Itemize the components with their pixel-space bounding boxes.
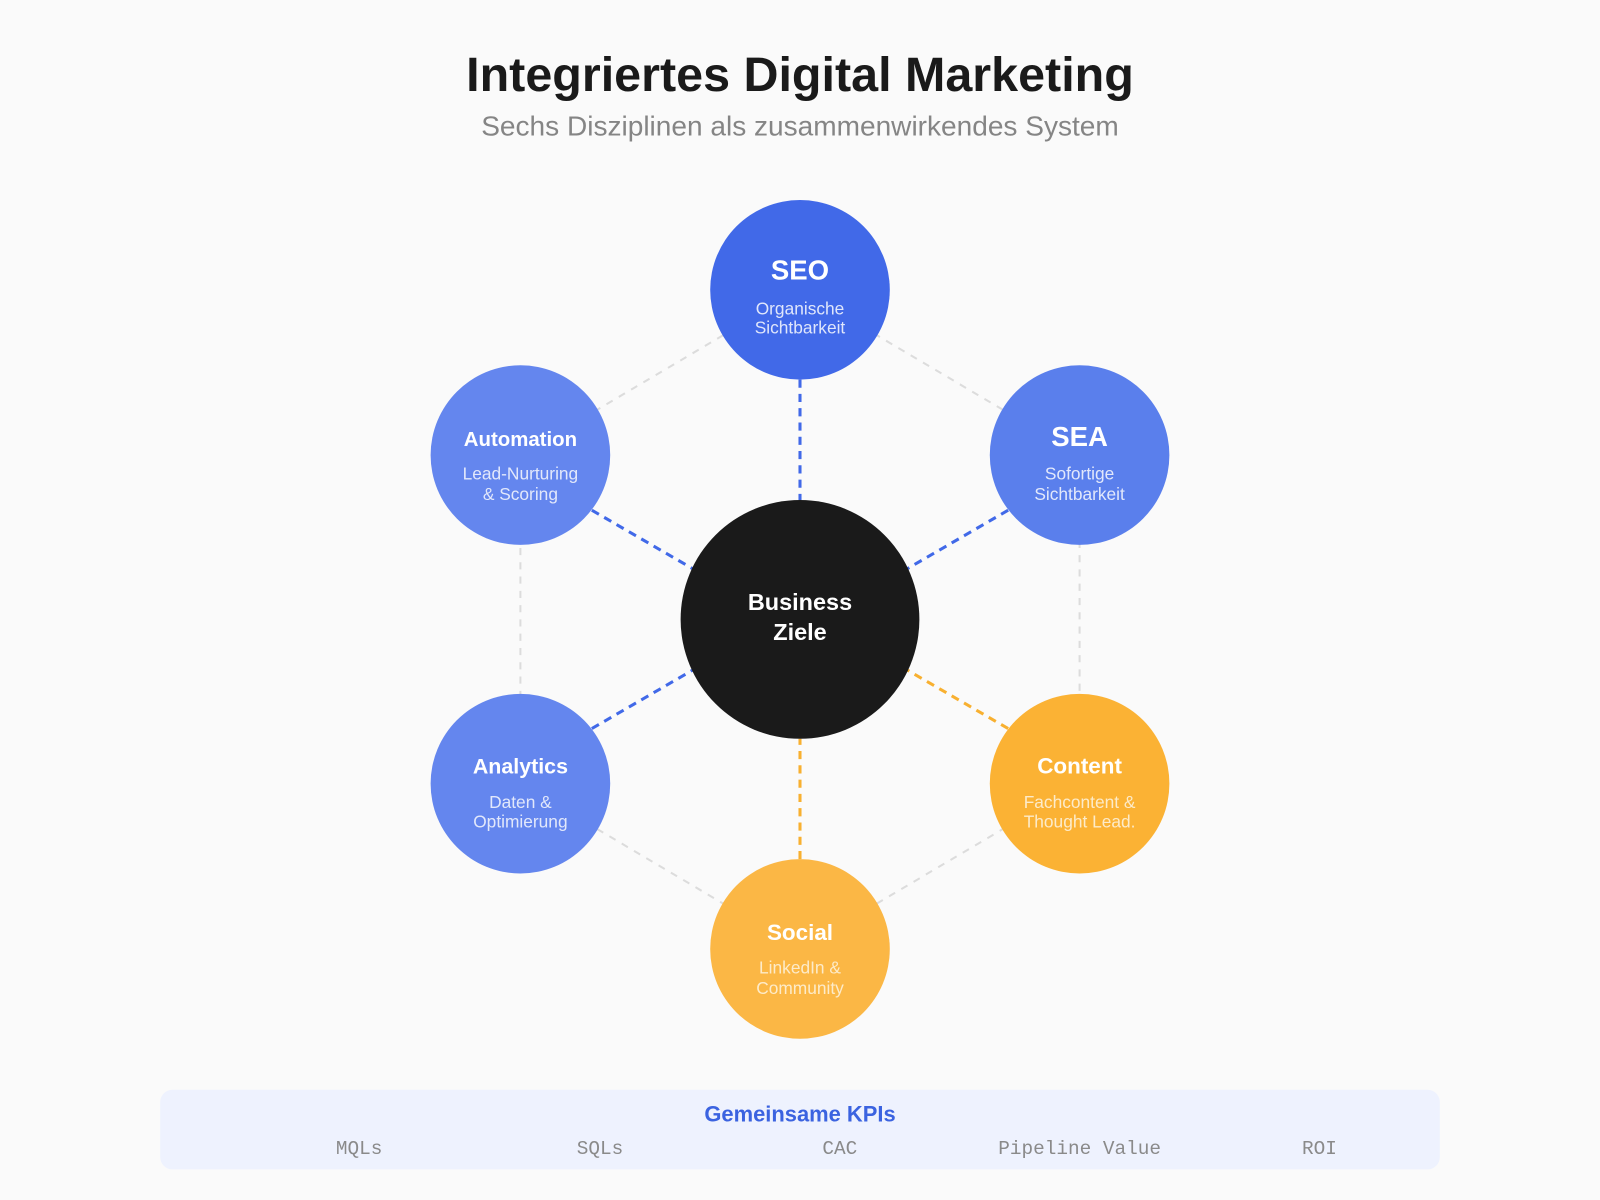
node: Automation bbox=[431, 365, 610, 545]
node: Automation: Lead-Nurturing bbox=[463, 464, 578, 484]
node: SEO: Sichtbarkeit bbox=[755, 318, 845, 338]
node: Automation: Automation bbox=[464, 429, 577, 451]
panel: Gemeinsame KPIs: SQLs bbox=[577, 1138, 623, 1160]
node: Analytics bbox=[431, 694, 610, 873]
node: Social: Social bbox=[767, 920, 833, 945]
node: Social: LinkedIn & bbox=[759, 957, 841, 977]
node: SEO bbox=[710, 200, 890, 380]
node: Social: Community bbox=[756, 978, 844, 998]
panel: Gemeinsame KPIs: Gemeinsame KPIs bbox=[704, 1101, 896, 1126]
node: Automation: & Scoring bbox=[483, 484, 558, 504]
node: SEO: SEO bbox=[771, 255, 829, 286]
panel: Gemeinsame KPIs: CAC bbox=[822, 1138, 857, 1160]
node: SEA: Sichtbarkeit bbox=[1034, 484, 1125, 504]
center: Business Ziele bbox=[681, 500, 919, 739]
node: Social bbox=[710, 859, 890, 1039]
panel: Gemeinsame KPIs: Pipeline Value bbox=[998, 1138, 1161, 1160]
center: Business Ziele: Business bbox=[748, 589, 852, 615]
panel: Gemeinsame KPIs bbox=[160, 1090, 1440, 1169]
spokes bbox=[592, 380, 1008, 859]
panel: Gemeinsame KPIs: MQLs bbox=[336, 1138, 382, 1160]
node: SEA: Sofortige bbox=[1045, 464, 1114, 484]
center: Business Ziele: Ziele bbox=[773, 619, 827, 645]
node: SEA: SEA bbox=[1051, 421, 1108, 452]
node: Content: Content bbox=[1037, 753, 1122, 778]
node: SEA bbox=[990, 365, 1169, 545]
node: Content: Thought Lead. bbox=[1024, 812, 1135, 832]
node: Analytics: Analytics bbox=[473, 754, 568, 778]
node: Analytics: Optimierung bbox=[473, 812, 568, 832]
node: Analytics: Daten & bbox=[489, 792, 552, 812]
node: Content bbox=[990, 694, 1169, 873]
title: Integriertes Digital Marketing bbox=[466, 48, 1134, 102]
node: Content: Fachcontent & bbox=[1024, 792, 1136, 812]
subtitle: Sechs Disziplinen als zusammenwirkendes System bbox=[481, 111, 1119, 142]
panel: Gemeinsame KPIs: ROI bbox=[1302, 1138, 1337, 1160]
node: SEO: Organische bbox=[756, 298, 844, 318]
